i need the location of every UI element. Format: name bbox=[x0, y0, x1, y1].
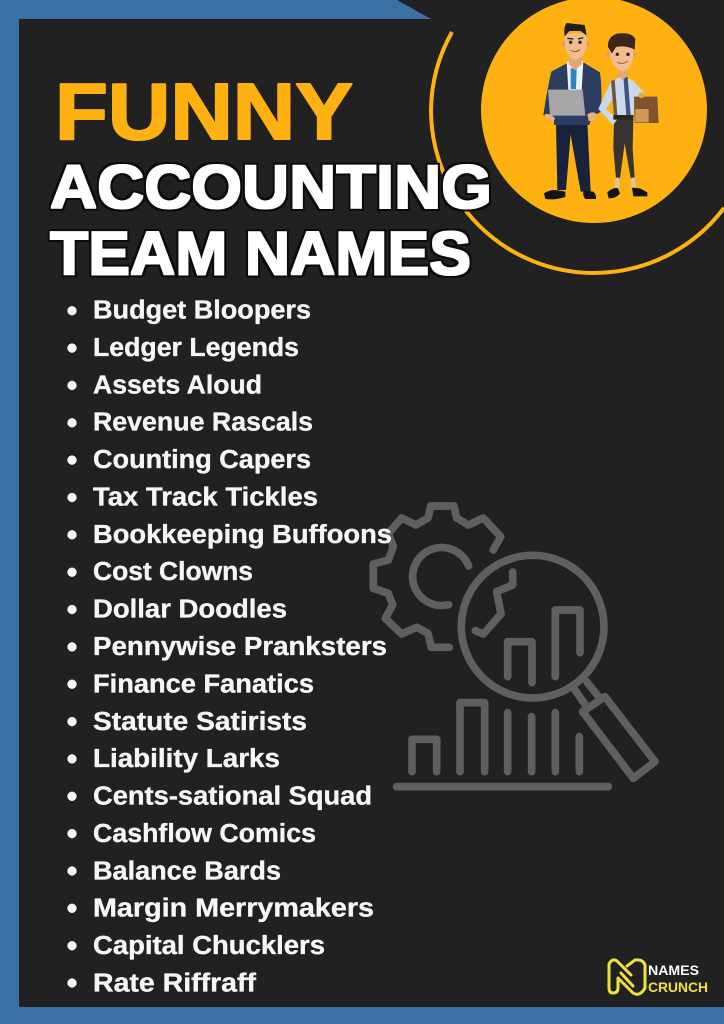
magnifier bbox=[461, 555, 655, 778]
list of team names: Budget Bloopers bbox=[93, 296, 311, 324]
logo mark bbox=[609, 960, 645, 994]
list of team names: Dollar Doodles bbox=[93, 596, 287, 624]
icon: gear, magnifier and bar chart bbox=[373, 506, 655, 787]
list of team names: Assets Aloud bbox=[93, 371, 262, 399]
bullets bbox=[68, 306, 76, 988]
yellow circle bbox=[481, 0, 707, 223]
man in suit bbox=[543, 23, 602, 199]
illustration: two accountants bbox=[543, 23, 659, 199]
list of team names: Revenue Rascals bbox=[93, 409, 313, 437]
title: TEAM NAMES: TEAM NAMES bbox=[50, 220, 471, 288]
list of team names: Statute Satirists bbox=[93, 708, 307, 736]
logo: Names Crunch bbox=[609, 960, 708, 995]
list of team names: Balance Bards bbox=[93, 857, 281, 885]
title: ACCOUNTING: ACCOUNTING bbox=[50, 153, 492, 221]
list of team names: Tax Track Tickles bbox=[93, 484, 318, 512]
man with bag bbox=[598, 33, 659, 198]
list of team names bbox=[68, 296, 392, 998]
yellow ring bbox=[431, 32, 724, 273]
list of team names: Finance Fanatics bbox=[93, 670, 314, 698]
list of team names: Ledger Legends bbox=[93, 334, 299, 362]
logo wordmark: NAMES: NAMES bbox=[648, 962, 699, 978]
list of team names: Cost Clowns bbox=[93, 558, 253, 586]
list of team names: Cashflow Comics bbox=[93, 820, 316, 848]
list of team names: Rate Riffraff bbox=[93, 970, 257, 998]
list of team names: Margin Merrymakers bbox=[93, 895, 374, 923]
list of team names: Bookkeeping Buffoons bbox=[93, 521, 392, 549]
bar chart bbox=[397, 610, 608, 787]
list of team names: Pennywise Pranksters bbox=[93, 633, 387, 661]
list of team names: Liability Larks bbox=[93, 745, 280, 773]
list of team names: Cents-sational Squad bbox=[93, 783, 372, 811]
list of team names: Capital Chucklers bbox=[93, 932, 325, 960]
title: FUNNY: FUNNY bbox=[55, 67, 353, 156]
gear bbox=[373, 506, 513, 647]
list of team names: Counting Capers bbox=[93, 446, 311, 474]
logo wordmark: CRUNCH: CRUNCH bbox=[648, 979, 708, 995]
